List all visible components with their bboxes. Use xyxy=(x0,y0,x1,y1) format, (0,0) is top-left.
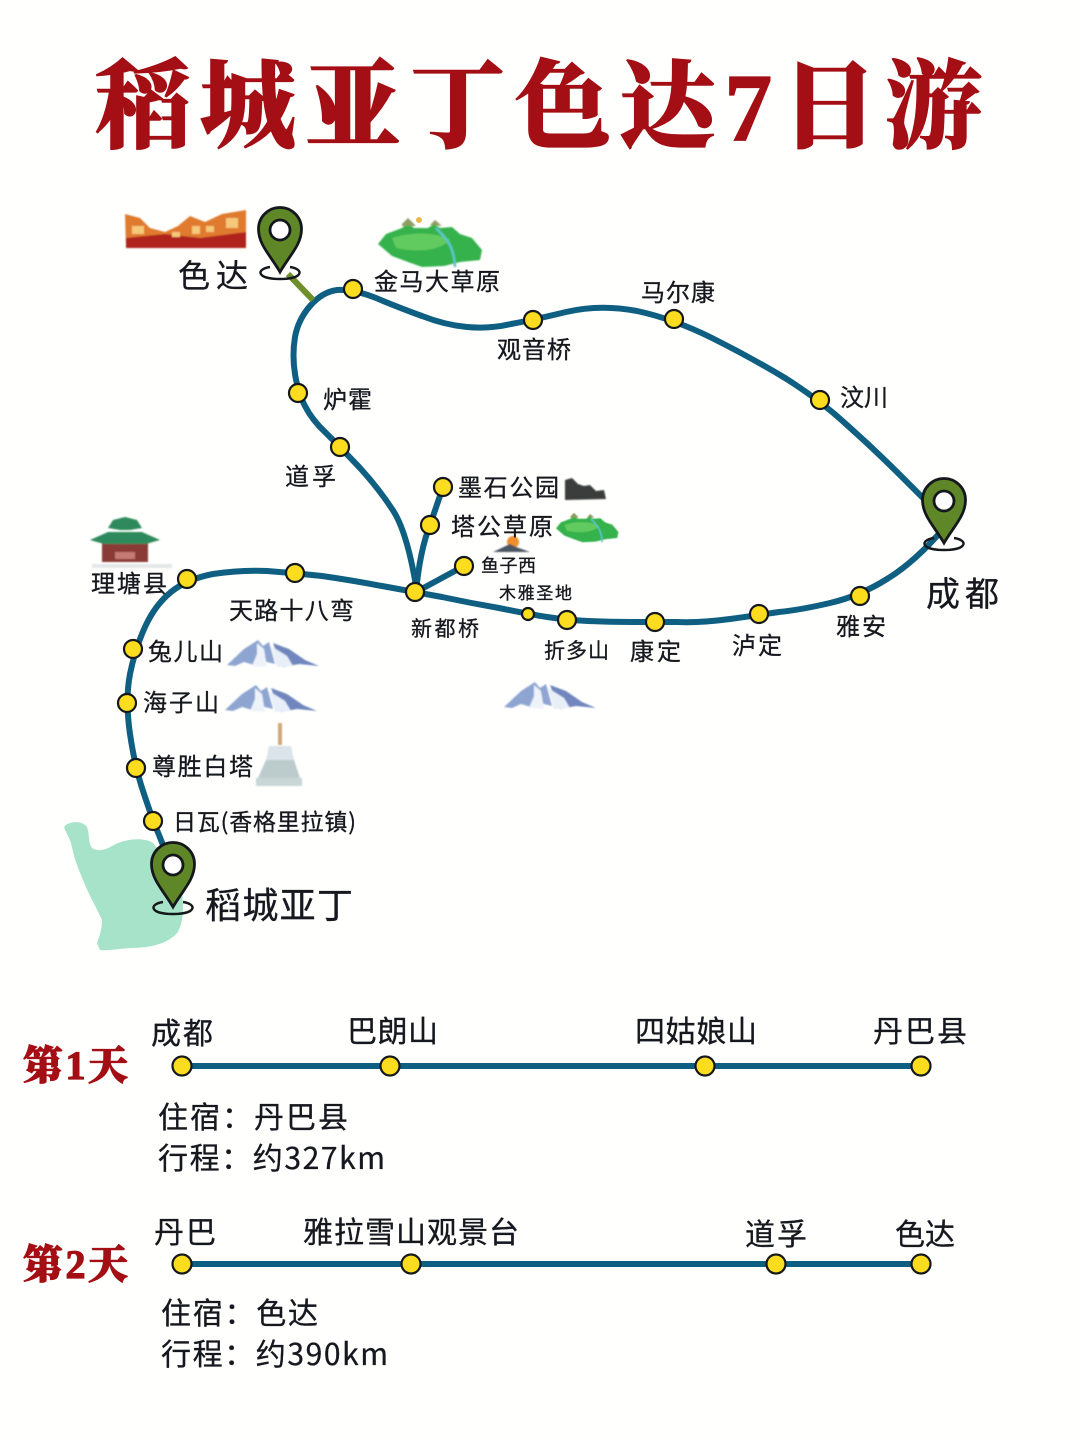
stop labels: day 2: 道孚 xyxy=(745,1219,807,1252)
illustration: grassland sun xyxy=(416,217,422,223)
illustration: 墨石 rocks xyxy=(565,478,606,500)
illustration: small grassland xyxy=(556,513,618,542)
map: route network xyxy=(64,208,999,950)
details: day 2: 行程：约390km xyxy=(161,1330,388,1374)
map labels: 道孚 xyxy=(285,464,336,491)
map labels: 色达 xyxy=(178,258,248,294)
map labels: 日瓦(香格里拉镇) xyxy=(173,803,356,837)
map labels: 兔儿山 xyxy=(148,639,223,666)
map labels: 折多山 xyxy=(544,640,609,663)
stop labels: day 2: 色达 xyxy=(895,1219,955,1252)
map labels: 康定 xyxy=(630,639,681,666)
stop labels: day 1 xyxy=(151,1016,967,1051)
day 1 panel xyxy=(23,1016,967,1178)
title: 稻城亚丁色达7日游 xyxy=(95,54,982,161)
stations xyxy=(118,280,869,830)
map labels: 成都 xyxy=(926,576,999,614)
map labels: 理塘县 xyxy=(91,571,167,598)
illustration: 理塘 temple xyxy=(90,517,172,566)
map labels: 海子山 xyxy=(143,690,219,717)
stop labels: day 2: 雅拉雪山观景台 xyxy=(303,1217,519,1250)
route line: 色达 spur xyxy=(288,274,313,300)
map labels: 塔公草原 xyxy=(451,514,553,541)
heading: day 1: 第1天 xyxy=(23,1043,128,1088)
day 2 panel xyxy=(23,1217,955,1374)
details: day 2: 住宿：色达 xyxy=(161,1298,318,1331)
stop labels: day 2 xyxy=(154,1217,955,1252)
map labels: 墨石公园 xyxy=(458,475,559,502)
map labels: 稻城亚丁 xyxy=(205,885,353,926)
details: day 1 xyxy=(158,1102,385,1178)
timeline: day 1 xyxy=(172,1056,930,1076)
illustration: 稻城亚丁 region xyxy=(64,822,183,950)
map labels xyxy=(91,258,999,926)
stop labels: day 2: 丹巴 xyxy=(154,1217,216,1250)
map labels: 木雅圣地 xyxy=(499,584,572,603)
pin: 色达 xyxy=(258,208,302,279)
details: day 2 xyxy=(161,1298,388,1374)
stop labels: day 1: 成都 xyxy=(151,1018,213,1051)
map labels: 马尔康 xyxy=(641,280,715,307)
stop labels: day 1: 四姑娘山 xyxy=(635,1016,757,1049)
illustration: 鱼子西 sunset mountain xyxy=(493,536,530,552)
stop labels: day 1: 巴朗山 xyxy=(347,1016,438,1049)
map labels: 尊胜白塔 xyxy=(152,754,253,781)
map labels: 炉霍 xyxy=(323,387,372,414)
illustration: snow mountains xyxy=(227,640,319,667)
illustration: grassland xyxy=(378,218,482,267)
route line: north loop xyxy=(294,290,925,592)
illustration: 色达 red houses xyxy=(125,210,246,248)
pin: 成都 xyxy=(922,478,966,550)
stop labels: day 1: 丹巴县 xyxy=(873,1016,967,1049)
details: day 1: 住宿：丹巴县 xyxy=(158,1102,348,1135)
timeline: day 2 xyxy=(172,1254,930,1274)
details: day 1: 行程：约327km xyxy=(158,1134,385,1178)
map labels: 新都桥 xyxy=(411,618,479,641)
map labels: 泸定 xyxy=(732,633,782,660)
map labels: 观音桥 xyxy=(497,337,571,364)
route line: main south line xyxy=(128,528,944,850)
pin: 稻城亚丁 xyxy=(152,842,194,914)
map labels: 汶川 xyxy=(840,385,888,412)
map labels: 金马大草原 xyxy=(374,269,500,296)
map labels: 雅安 xyxy=(836,614,886,641)
route line: side branches xyxy=(416,487,464,592)
illustration: white stupa xyxy=(256,723,302,786)
heading: day 2: 第2天 xyxy=(23,1242,128,1287)
map labels: 天路十八弯 xyxy=(229,598,354,625)
map labels: 鱼子西 xyxy=(481,556,536,576)
